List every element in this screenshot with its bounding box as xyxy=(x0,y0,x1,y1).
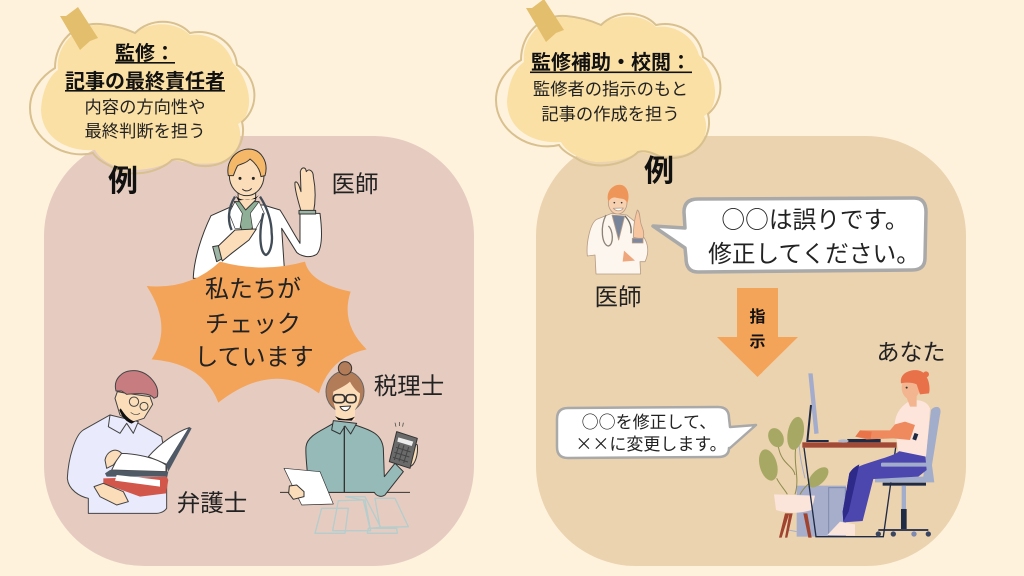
label: tax accountant: 税理士 xyxy=(374,373,444,399)
heading: supervisor role: 記事の最終責任者 xyxy=(65,70,225,93)
text: your reply: ○○を修正して、 xyxy=(582,408,716,433)
callout: supervisor cloud xyxy=(30,7,254,173)
text: supervisor description: 内容の方向性や xyxy=(85,97,205,117)
heading: right example: 例 xyxy=(644,155,674,188)
text: supervisor description xyxy=(85,97,205,141)
illustration: doctor raising hand xyxy=(193,149,321,278)
text: assistant description xyxy=(533,79,688,124)
heading: supervisor role: 監修： xyxy=(115,42,175,65)
panel: left example background xyxy=(44,136,474,566)
arrow: instruction xyxy=(717,288,798,377)
label: doctor right: 医師 xyxy=(594,284,642,310)
plant xyxy=(756,416,832,538)
text: instruction label xyxy=(749,308,766,351)
graphic: orange burst xyxy=(147,262,367,403)
text: doctor instruction: ○○は誤りです。 xyxy=(721,201,909,235)
text: burst message: しています xyxy=(194,344,314,371)
speech bubble: your reply xyxy=(557,407,756,458)
text: burst message: チェック xyxy=(205,311,301,338)
text: burst message xyxy=(194,276,314,371)
text: doctor instruction: 修正してください。 xyxy=(708,241,920,268)
label: doctor: 医師 xyxy=(332,171,378,197)
illustration: person at desk with plant xyxy=(756,370,941,538)
heading: left example: 例 xyxy=(108,165,138,198)
text: doctor instruction xyxy=(708,201,920,268)
panel: right example background xyxy=(536,136,966,566)
text: your reply xyxy=(575,408,727,455)
text: your reply: ××に変更します。 xyxy=(575,430,727,455)
text: instruction label: 示 xyxy=(749,334,766,351)
text: assistant description: 記事の作成を担う xyxy=(541,104,680,124)
callout: assistant cloud xyxy=(496,0,720,165)
text: burst message: 私たちが xyxy=(205,276,301,303)
heading: supervisor role xyxy=(65,42,225,93)
illustration: lawyer with books xyxy=(67,371,192,513)
illustration: doctor pointing xyxy=(587,185,648,274)
icon: tape xyxy=(526,0,564,42)
speech bubble: doctor instruction xyxy=(653,198,926,272)
text: supervisor description: 最終判断を担う xyxy=(85,121,205,141)
label: you: あなた xyxy=(876,339,946,365)
text: assistant description: 監修者の指示のもと xyxy=(533,79,688,99)
text: instruction label: 指 xyxy=(749,308,766,326)
label: lawyer: 弁護士 xyxy=(177,490,247,516)
heading: assistant role: 監修補助・校閲： xyxy=(531,51,691,74)
icon: tape xyxy=(60,7,98,50)
illustration: accountant with calculator xyxy=(280,362,417,533)
